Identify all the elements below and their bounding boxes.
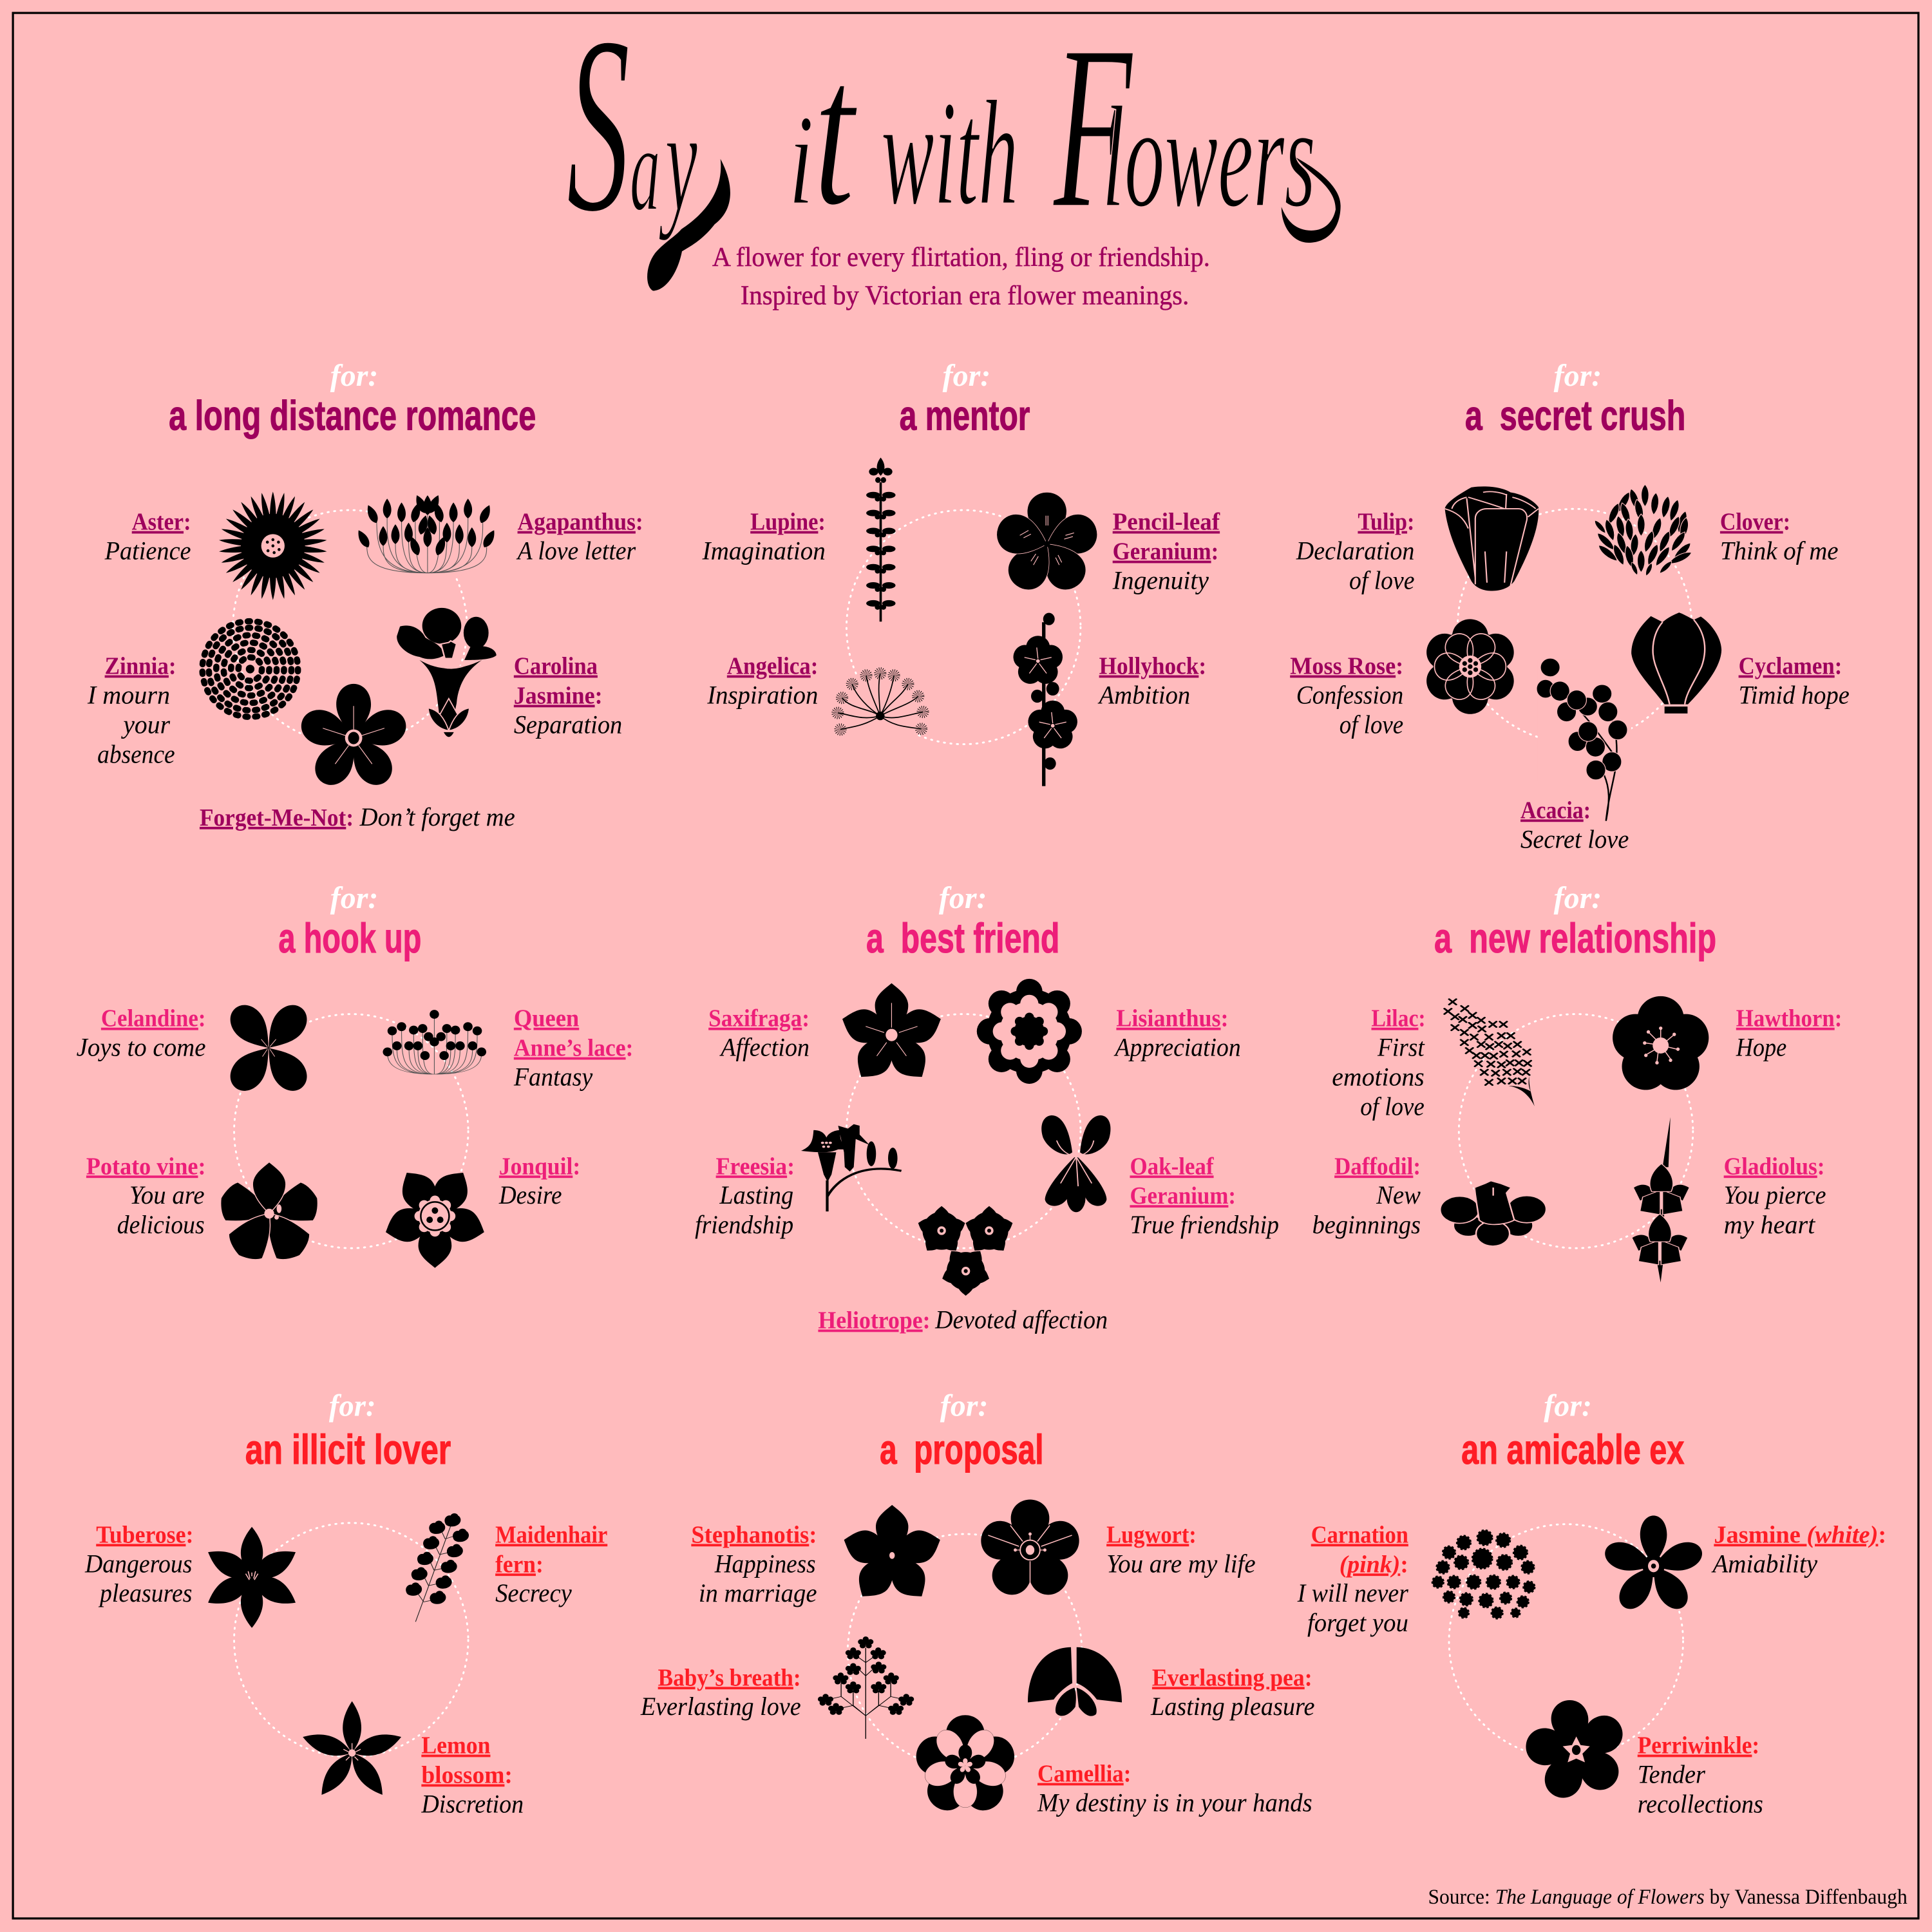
icon: baby's breath (818, 1636, 914, 1739)
label: Freesia: Freesia: (716, 1153, 795, 1180)
label: Perriwinkle: recollections (1638, 1789, 1763, 1818)
label: Camellia (1037, 1761, 1312, 1817)
label: Oak-leaf Geranium: Oak-leaf (1130, 1153, 1215, 1180)
label: Celandine: Joys to come (77, 1033, 206, 1062)
label: Hollyhock: Hollyhock: (1099, 653, 1206, 680)
label: Gladiolus (1724, 1153, 1826, 1239)
label: Everlasting pea: Everlasting pea: (1152, 1664, 1312, 1691)
source note: Source: The Language of Flowers by Vanessa Diffenbaugh (1428, 1886, 1908, 1909)
label: Tuberose: Dangerous (84, 1549, 192, 1578)
label: Stephanotis: Stephanotis: (691, 1521, 817, 1548)
label: Carolina Jasmine: Separation (514, 710, 622, 739)
label: Lilac: Lilac: (1371, 1005, 1426, 1032)
dotted ring (1449, 1524, 1683, 1758)
label: Lilac: First (1377, 1033, 1425, 1062)
label: Jasmine (white): Amiability (1711, 1549, 1817, 1578)
label: Daffodil: New (1376, 1180, 1421, 1209)
label: Maidenhair fern: fern: (495, 1551, 544, 1578)
for label: for: (1554, 881, 1602, 915)
icon: lemon blossom (300, 1701, 404, 1800)
label: Queen Anne's lace: Fantasy (513, 1063, 592, 1092)
label: Stephanotis: Happiness (714, 1549, 816, 1578)
label: Freesia: friendship (695, 1210, 793, 1239)
label: Jonquil: Jonquil: (499, 1153, 580, 1180)
label: Perriwinkle (1638, 1732, 1763, 1818)
icon: potato vine (214, 1162, 324, 1267)
label: Baby's breath: Everlasting love (640, 1692, 801, 1721)
label: Acacia: Acacia: (1520, 797, 1591, 824)
label: Oak-leaf Geranium: True friendship (1130, 1210, 1279, 1239)
panel: a new relationship (1312, 881, 1842, 1282)
label: Lilac: of love (1360, 1092, 1425, 1121)
title (567, 0, 1341, 291)
label: Saxifraga (708, 1005, 810, 1062)
label: Daffodil: Daffodil: (1334, 1153, 1421, 1180)
icon: angelica (828, 670, 931, 743)
label: Oak-leaf Geranium: Geranium: (1130, 1182, 1236, 1209)
label: Clover: Think of me (1720, 536, 1839, 565)
icon: freesia (801, 1124, 902, 1211)
label: Jasmine (white): Jasmine (white): (1714, 1521, 1886, 1548)
icon: agapanthus (355, 493, 498, 582)
label: Clover (1720, 509, 1839, 565)
label: Gladiolus: You pierce (1724, 1180, 1826, 1209)
label: Acacia: Secret love (1520, 824, 1629, 853)
label: Tulip: Declaration (1296, 536, 1414, 565)
label: Carnation (pink) (1297, 1521, 1408, 1637)
label: Freesia (695, 1153, 795, 1239)
label: Lupine (702, 509, 826, 565)
label: Lisianthus (1113, 1005, 1241, 1062)
label: Perriwinkle: Tender (1638, 1759, 1705, 1788)
label: Hollyhock: Ambition (1097, 680, 1190, 709)
label: Lemon blossom (421, 1732, 524, 1818)
label: Queen Anne's lace: Anne’s lace: (514, 1035, 633, 1062)
label: Pencil-leaf Geranium: Ingenuity (1112, 566, 1209, 595)
label: Celandine (77, 1005, 206, 1062)
for label: for: (329, 1388, 376, 1423)
label: Moss Rose (1290, 653, 1403, 739)
label: Everlasting pea (1150, 1664, 1314, 1721)
label: Tulip: of love (1349, 566, 1414, 595)
label: Moss Rose: Confession (1296, 680, 1403, 709)
label: Maidenhair fern: Secrecy (495, 1578, 572, 1607)
label: Daffodil (1312, 1153, 1421, 1239)
title: Flowers (1052, 0, 1316, 257)
label: Pencil-leaf Geranium (1112, 509, 1220, 595)
label: Potato vine: Potato vine: (86, 1153, 206, 1180)
panel: an amicable ex (1297, 1388, 1886, 1818)
icon: pencil-leaf geranium (992, 492, 1103, 598)
dotted ring (1457, 509, 1692, 743)
label: Lemon blossom: Lemon (421, 1732, 490, 1759)
icon: saxifraga (837, 983, 946, 1086)
icon: carolina jasmine (397, 608, 497, 737)
label: Zinnia: I mourn (87, 680, 170, 709)
label: Cyclamen (1739, 653, 1850, 709)
label: Angelica: Inspiration (706, 680, 818, 709)
label: Aster: Aster: (132, 509, 191, 536)
label: Carnation (pink): (pink): (1340, 1551, 1408, 1578)
label: Cyclamen: Timid hope (1739, 680, 1850, 709)
label: Aster: Patience (104, 536, 191, 565)
label: Aster (104, 509, 191, 565)
heading: a new relationship: a new relationship (1434, 914, 1716, 961)
heading: a mentor: a mentor (900, 392, 1030, 439)
label: Freesia: Lasting (719, 1180, 793, 1209)
label: Lupine: Lupine: (750, 509, 826, 536)
icon: acacia (1537, 658, 1631, 821)
label: Jonquil (498, 1153, 580, 1209)
icon: stephanotis (839, 1505, 945, 1606)
label: Lilac (1332, 1005, 1426, 1121)
label: Lugwort: Lugwort: (1106, 1521, 1197, 1548)
label: Stephanotis (691, 1521, 817, 1607)
label: Carolina Jasmine (514, 653, 622, 739)
icon: everlasting pea (1028, 1647, 1122, 1716)
label: Lisianthus: Lisianthus: (1116, 1005, 1229, 1032)
dotted ring (846, 1014, 1081, 1248)
icon: daffodil (1440, 1180, 1546, 1246)
label: Carnation (pink): I will never (1297, 1578, 1408, 1607)
label: Perriwinkle: Perriwinkle: (1638, 1732, 1759, 1759)
label: Potato vine: delicious (117, 1210, 205, 1239)
label: Zinnia (87, 653, 176, 768)
icon: maidenhair fern (406, 1513, 469, 1622)
label: Maidenhair fern: Maidenhair (495, 1521, 607, 1548)
label: Hawthorn: Hope (1736, 1033, 1786, 1062)
icon: hawthorn (1607, 996, 1715, 1099)
heading: a secret crush: a secret crush (1465, 392, 1685, 439)
label: Carolina Jasmine: Carolina (514, 653, 598, 680)
dotted ring (848, 1534, 1082, 1768)
icon: lupine (866, 458, 896, 621)
icon: celandine (223, 998, 314, 1098)
icon: hollyhock (1010, 613, 1081, 786)
for label: for: (943, 359, 990, 393)
panel: a proposal (640, 1388, 1314, 1818)
for label: for: (330, 359, 378, 393)
label: Gladiolus: my heart (1724, 1210, 1815, 1239)
label: Lupine: Imagination (702, 536, 826, 565)
icon: carnation (1432, 1530, 1535, 1618)
label: Acacia (1520, 797, 1629, 853)
heading: a long distance romance: a long distance romance (169, 392, 536, 439)
heading: a best friend: a best friend (866, 914, 1059, 961)
label: Saxifraga: Saxifraga: (708, 1005, 810, 1032)
label: Pencil-leaf Geranium: Geranium: (1113, 538, 1218, 565)
label: Pencil-leaf Geranium: Pencil-leaf (1113, 509, 1220, 536)
label: Moss Rose: Moss Rose: (1290, 653, 1403, 680)
dotted ring (1459, 1014, 1693, 1248)
title: it (788, 17, 860, 249)
label: Cyclamen: Cyclamen: (1739, 653, 1842, 680)
subtitle: Inspired by Victorian era flower meanings. (741, 281, 1189, 311)
label: Gladiolus: Gladiolus: (1724, 1153, 1825, 1180)
for label: for: (330, 881, 378, 915)
label: Zinnia: your (120, 710, 170, 739)
label: Zinnia: absence (97, 739, 175, 768)
icon: perriwinkle (1524, 1697, 1629, 1804)
label: Lilac: emotions (1332, 1063, 1425, 1092)
label: Queen Anne's lace: Queen (514, 1005, 579, 1032)
heading: an amicable ex: an amicable ex (1461, 1426, 1684, 1473)
dotted ring (234, 1014, 468, 1248)
label: Oak-leaf Geranium (1130, 1153, 1279, 1239)
icon: heliotrope (916, 1206, 1015, 1296)
icon: lugwort (976, 1499, 1084, 1602)
label: Potato vine (86, 1153, 206, 1239)
label: Lugwort: You are my life (1106, 1549, 1256, 1578)
icon: lilac (1444, 999, 1535, 1106)
label: Camellia: Camellia: (1037, 1761, 1131, 1788)
label: Angelica: Angelica: (727, 653, 818, 680)
label: Camellia: My destiny is in your hands (1037, 1788, 1312, 1817)
panel: a best friend (695, 881, 1279, 1334)
label: Carnation (pink): Carnation (1311, 1521, 1408, 1548)
icon: camellia (911, 1715, 1019, 1818)
label: Queen Anne's lace (513, 1005, 633, 1092)
icon: tuberose (203, 1527, 301, 1628)
heading: a proposal: a proposal (880, 1426, 1044, 1473)
heading: an illicit lover: an illicit lover (245, 1426, 451, 1473)
label: Heliotrope: Devoted affection (934, 1305, 1108, 1334)
label: Tuberose: Tuberose: (96, 1521, 193, 1548)
label: Baby's breath (640, 1664, 801, 1721)
icon: jonquil (381, 1164, 489, 1268)
dotted ring (846, 510, 1081, 744)
label: Everlasting pea: Lasting pleasure (1150, 1692, 1314, 1721)
label: Carnation (pink): forget you (1307, 1608, 1408, 1637)
label: Lemon blossom: Discretion (421, 1789, 524, 1818)
label: Zinnia: Zinnia: (105, 653, 176, 680)
panel: a secret crush (1290, 359, 1850, 853)
label: Tulip: Tulip: (1358, 509, 1414, 536)
label: Clover: Clover: (1720, 509, 1790, 536)
for label: for: (1544, 1388, 1592, 1423)
label: Lemon blossom: blossom: (421, 1761, 513, 1788)
label: Moss Rose: of love (1340, 710, 1403, 739)
panel: an illicit lover (84, 1388, 607, 1818)
icon: clover (1593, 484, 1694, 576)
subtitle: A flower for every flirtation, fling or friendship. (712, 242, 1210, 272)
icon: moss rose (1420, 619, 1520, 714)
label: Lugwort (1106, 1521, 1256, 1578)
icon: tulip (1445, 486, 1539, 591)
icon: jasmine (1602, 1515, 1706, 1615)
label: Angelica (706, 653, 818, 709)
label: Saxifraga: Affection (719, 1033, 810, 1062)
label: Agapanthus: Agapanthus: (518, 509, 643, 536)
label: Hawthorn: Hawthorn: (1736, 1005, 1842, 1032)
label: Heliotrope (818, 1305, 1108, 1334)
label: Hawthorn (1736, 1005, 1842, 1062)
label: Jonquil: Desire (498, 1180, 562, 1209)
icon: queen anne's lace (383, 1010, 486, 1074)
label: Forget-Me-Not: Don’t forget me (359, 802, 515, 831)
dotted ring (234, 1523, 468, 1757)
label: Tulip (1296, 509, 1414, 595)
for label: for: (939, 881, 987, 915)
label: Stephanotis: in marriage (699, 1578, 817, 1607)
label: Baby's breath: Baby’s breath: (658, 1664, 801, 1691)
label: Potato vine: You are (129, 1180, 205, 1209)
label: Forget-Me-Not (200, 802, 515, 831)
icon: lisianthus (977, 979, 1082, 1084)
dotted ring (233, 510, 467, 744)
icon: forget-me-not (297, 684, 410, 792)
label: Agapanthus: A love letter (516, 536, 636, 565)
label: Tuberose (84, 1521, 193, 1607)
icon: cyclamen (1631, 612, 1721, 714)
label: Tuberose: pleasures (98, 1578, 192, 1607)
icon: aster (205, 482, 341, 610)
label: Daffodil: beginnings (1312, 1210, 1421, 1239)
heading: a hook up: a hook up (278, 914, 421, 961)
label: Hollyhock (1097, 653, 1206, 709)
label: Lisianthus: Appreciation (1113, 1033, 1241, 1062)
title: with (881, 71, 1018, 236)
panel: a mentor (702, 359, 1220, 786)
label: Heliotrope: Heliotrope: (818, 1307, 931, 1334)
icon: oak-leaf geranium (1041, 1115, 1110, 1212)
icon: zinnia (202, 621, 298, 717)
label: Jasmine (white) (1711, 1521, 1886, 1578)
for label: for: (1554, 359, 1602, 393)
label: Celandine: Celandine: (101, 1005, 206, 1032)
panel: a hook up (77, 881, 633, 1268)
label: Forget-Me-Not: Forget-Me-Not: (200, 804, 354, 831)
label: Agapanthus (516, 509, 643, 565)
label: Carolina Jasmine: Jasmine: (514, 682, 603, 709)
label: Maidenhair fern (495, 1521, 607, 1607)
for label: for: (940, 1388, 988, 1423)
subtitle (712, 242, 1210, 311)
panel: a long distance romance (87, 359, 643, 831)
icon: gladiolus (1632, 1117, 1689, 1282)
